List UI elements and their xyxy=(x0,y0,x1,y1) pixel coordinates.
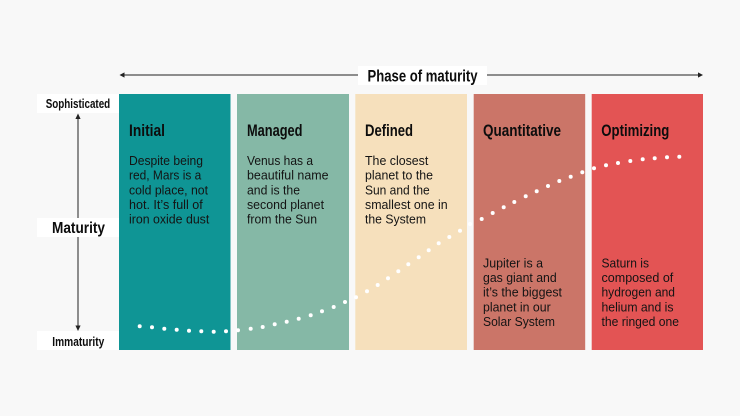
text: Managed description: and is the xyxy=(247,182,300,197)
text: Optimizing description: composed of xyxy=(602,270,674,285)
axis label: Sophisticated: Sophisticated xyxy=(46,97,110,111)
text: Quantitative description: gas giant and xyxy=(483,270,557,285)
text: Defined description: the System xyxy=(365,212,426,227)
text: Initial description: red, Mars is a xyxy=(129,168,202,183)
text: Defined description: The closest xyxy=(365,153,429,168)
text: Optimizing description xyxy=(602,255,679,329)
heading: Initial: Initial xyxy=(129,122,165,140)
text: Initial description: iron oxide dust xyxy=(129,212,210,227)
panel: Initial xyxy=(119,94,230,350)
heading: phase of maturity: Phase of maturity xyxy=(368,68,478,86)
text: Defined description: smallest one in xyxy=(365,197,448,212)
axis label: Maturity xyxy=(37,218,119,237)
axis label: Immaturity xyxy=(37,331,119,350)
heading: Defined: Defined xyxy=(365,122,413,140)
text: Managed description: from the Sun xyxy=(247,212,317,227)
text: Quantitative description: it’s the biggest xyxy=(483,285,562,300)
text: Quantitative description: Solar System xyxy=(483,314,555,329)
axis label: Sophisticated xyxy=(37,94,119,113)
text: Quantitative description xyxy=(483,255,562,329)
text: Initial description: hot. It’s full of xyxy=(129,197,203,212)
text: Optimizing description: hydrogen and xyxy=(602,285,675,300)
text: Initial description: Despite being xyxy=(129,153,203,168)
text: Defined description: planet to the xyxy=(365,168,433,183)
text: Defined description xyxy=(365,153,448,227)
panel: Managed xyxy=(237,94,349,350)
text: Managed description xyxy=(247,153,328,227)
text: Optimizing description: helium and is xyxy=(602,299,674,314)
panel: Quantitative xyxy=(474,94,585,350)
text: Optimizing description: Saturn is xyxy=(602,255,649,270)
text: Managed description: second planet xyxy=(247,197,324,212)
heading: Optimizing: Optimizing xyxy=(601,122,669,140)
panel: Defined xyxy=(355,94,467,350)
heading: Quantitative: Quantitative xyxy=(483,122,561,140)
text: Quantitative description: planet in our xyxy=(483,299,551,314)
dotted maturity curve xyxy=(138,155,681,334)
panel: Optimizing xyxy=(592,94,703,350)
horizontal arrow: phase of maturity xyxy=(120,72,703,78)
vertical arrow: maturity axis xyxy=(75,114,81,331)
heading: Managed: Managed xyxy=(247,122,302,140)
text: Managed description: Venus has a xyxy=(247,153,314,168)
text: Initial description xyxy=(129,153,210,227)
axis label: Immaturity: Immaturity xyxy=(52,335,104,349)
text: Initial description: cold place, not xyxy=(129,182,208,197)
text: Managed description: beautiful name xyxy=(247,168,328,183)
text: Defined description: Sun and the xyxy=(365,182,430,197)
text: Optimizing description: the ringed one xyxy=(602,314,679,329)
axis label: Maturity: Maturity xyxy=(52,220,105,237)
text: Quantitative description: Jupiter is a xyxy=(483,255,544,270)
